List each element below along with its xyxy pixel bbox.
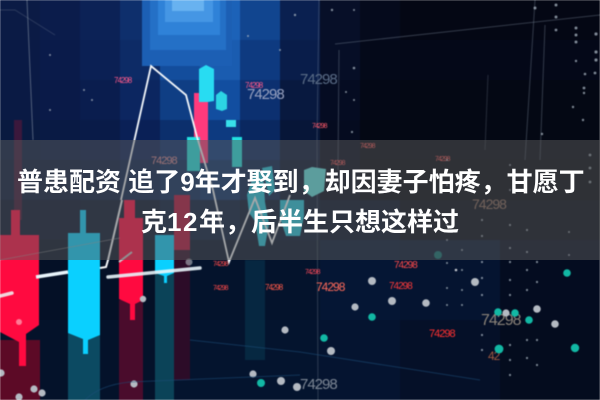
translucent title band xyxy=(0,140,600,260)
number labels: 74298 xyxy=(316,280,346,294)
number labels: 74298 xyxy=(330,160,346,167)
number labels: 74298 xyxy=(472,196,507,212)
number labels: 74298 xyxy=(429,328,455,340)
number labels: 74298 xyxy=(213,261,229,268)
number labels: 74298 xyxy=(305,269,321,276)
number labels xyxy=(114,71,522,393)
number labels: 74298 xyxy=(481,312,522,329)
number labels: 74298 xyxy=(435,156,451,163)
data dots: grey xyxy=(0,258,559,400)
lower floor lines xyxy=(85,340,480,400)
trend line xyxy=(0,66,290,296)
number labels: 42 xyxy=(488,349,501,363)
data dots: teal xyxy=(257,251,579,387)
number labels: 74298 xyxy=(312,123,328,130)
number labels: 74298 xyxy=(389,281,413,292)
title: 克12年，后半生只想这样过 xyxy=(141,207,459,237)
number labels: 74298 xyxy=(245,81,264,90)
number labels: 74298 xyxy=(394,260,418,271)
number labels: 74298 xyxy=(360,143,376,150)
number labels: 74298 xyxy=(300,71,337,88)
number labels: 74298 xyxy=(300,376,337,393)
background columns xyxy=(0,120,265,400)
number labels: 74298 xyxy=(213,285,229,292)
title xyxy=(17,167,585,237)
number labels: 74298 xyxy=(265,283,284,292)
title: 普患配资 追了9年才娶到，却因妻子怕疼，甘愿丁 xyxy=(17,167,585,197)
candlesticks: red xyxy=(0,93,208,366)
candlesticks: cyan xyxy=(68,65,326,354)
number labels: 74298 xyxy=(247,86,284,103)
number labels: 74298 xyxy=(114,76,133,85)
number labels: 74298 xyxy=(151,155,177,167)
top blue glow xyxy=(142,0,232,66)
